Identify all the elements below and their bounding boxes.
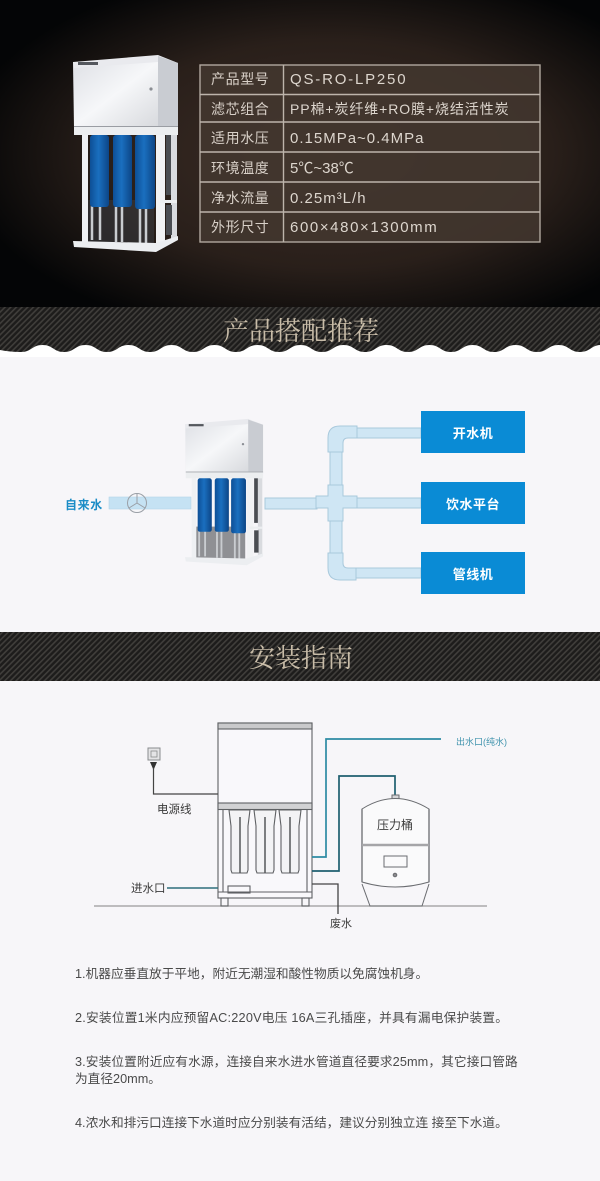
ground line bbox=[94, 905, 487, 907]
section: pairing diagram bbox=[65, 411, 525, 594]
spec row: temperature bbox=[211, 160, 354, 177]
inlet line bbox=[167, 887, 218, 889]
machine outline bbox=[218, 723, 312, 906]
pipe network bbox=[265, 426, 421, 580]
section banner: install guide bbox=[0, 632, 600, 681]
instructions text bbox=[75, 966, 518, 1130]
section banner: product pairing bbox=[0, 307, 600, 357]
spec row: flow: 净水流量 bbox=[211, 190, 269, 206]
instruction 3: 为直径20mm。 bbox=[75, 1072, 161, 1086]
icon: valve bbox=[128, 494, 146, 512]
water source label: 自来水 bbox=[65, 497, 103, 512]
installation diagram bbox=[94, 723, 507, 930]
spec row: pressure: 0.15MPa~0.4MPa bbox=[290, 130, 424, 147]
instruction 3 bbox=[75, 1054, 518, 1086]
spec row: flow bbox=[211, 190, 367, 207]
spec row: model bbox=[211, 71, 407, 88]
label: outlet: 出水口(纯水) bbox=[456, 736, 507, 747]
spec row: size: 600×480×1300mm bbox=[290, 219, 438, 236]
pressure tank bbox=[362, 795, 429, 906]
pure water outlet pipe bbox=[312, 739, 441, 857]
pipe to pressure tank bbox=[312, 776, 395, 871]
heading: 产品搭配推荐: 产品搭配推荐 bbox=[223, 317, 379, 346]
pipe: inlet bbox=[109, 497, 191, 509]
label: power cord: 电源线 bbox=[157, 802, 192, 816]
label: pressure tank: 压力桶 bbox=[377, 817, 413, 832]
product photo: purifier bbox=[185, 419, 263, 565]
instruction 1: 1.机器应垂直放于平地，附近无潮湿和酸性物质以免腐蚀机身。 bbox=[75, 966, 428, 981]
instruction 2: 2.安装位置1米内应预留AC:220V电压 16A三孔插座，并具有漏电保护装置。 bbox=[75, 1010, 508, 1025]
specification table bbox=[200, 65, 540, 242]
waste water pipe bbox=[312, 884, 338, 914]
spec row: model: 产品型号 bbox=[211, 71, 269, 87]
spec row: pressure: 适用水压 bbox=[211, 130, 269, 146]
box: 饮水平台 bbox=[421, 482, 525, 524]
box: 管线机 bbox=[421, 552, 525, 594]
spec row: filter: PP棉+炭纤维+RO膜+烧结活性炭 bbox=[290, 101, 510, 117]
spec row: temperature: 5℃~38℃ bbox=[290, 160, 354, 177]
box: 开水机: 开水机 bbox=[453, 426, 493, 441]
spec row: size bbox=[211, 219, 438, 236]
spec row: pressure bbox=[211, 130, 424, 147]
box: 饮水平台: 饮水平台 bbox=[446, 497, 500, 512]
spec row: model: QS-RO-LP250 bbox=[290, 71, 407, 88]
spec row: flow: 0.25m³L/h bbox=[290, 190, 367, 207]
box: 管线机: 管线机 bbox=[453, 567, 493, 582]
instruction 3: 3.安装位置附近应有水源，连接自来水进水管道直径要求25mm，其它接口管路 bbox=[75, 1054, 518, 1069]
instruction 4: 4.浓水和排污口连接下水道时应分别装有活结，建议分别独立连 接至下水道。 bbox=[75, 1115, 508, 1130]
heading: 安装指南: 安装指南 bbox=[249, 644, 353, 673]
icon: socket and power cord bbox=[148, 748, 218, 794]
spec row: size: 外形尺寸 bbox=[211, 219, 269, 235]
label: water inlet: 进水口 bbox=[131, 882, 166, 895]
panel: dark product header bbox=[0, 0, 600, 308]
spec row: filter: 滤芯组合 bbox=[211, 101, 269, 117]
label: waste water: 废水 bbox=[330, 916, 352, 930]
product photo: water purifier bbox=[73, 55, 178, 252]
box: 开水机 bbox=[421, 411, 525, 453]
spec row: temperature: 环境温度 bbox=[211, 160, 269, 176]
